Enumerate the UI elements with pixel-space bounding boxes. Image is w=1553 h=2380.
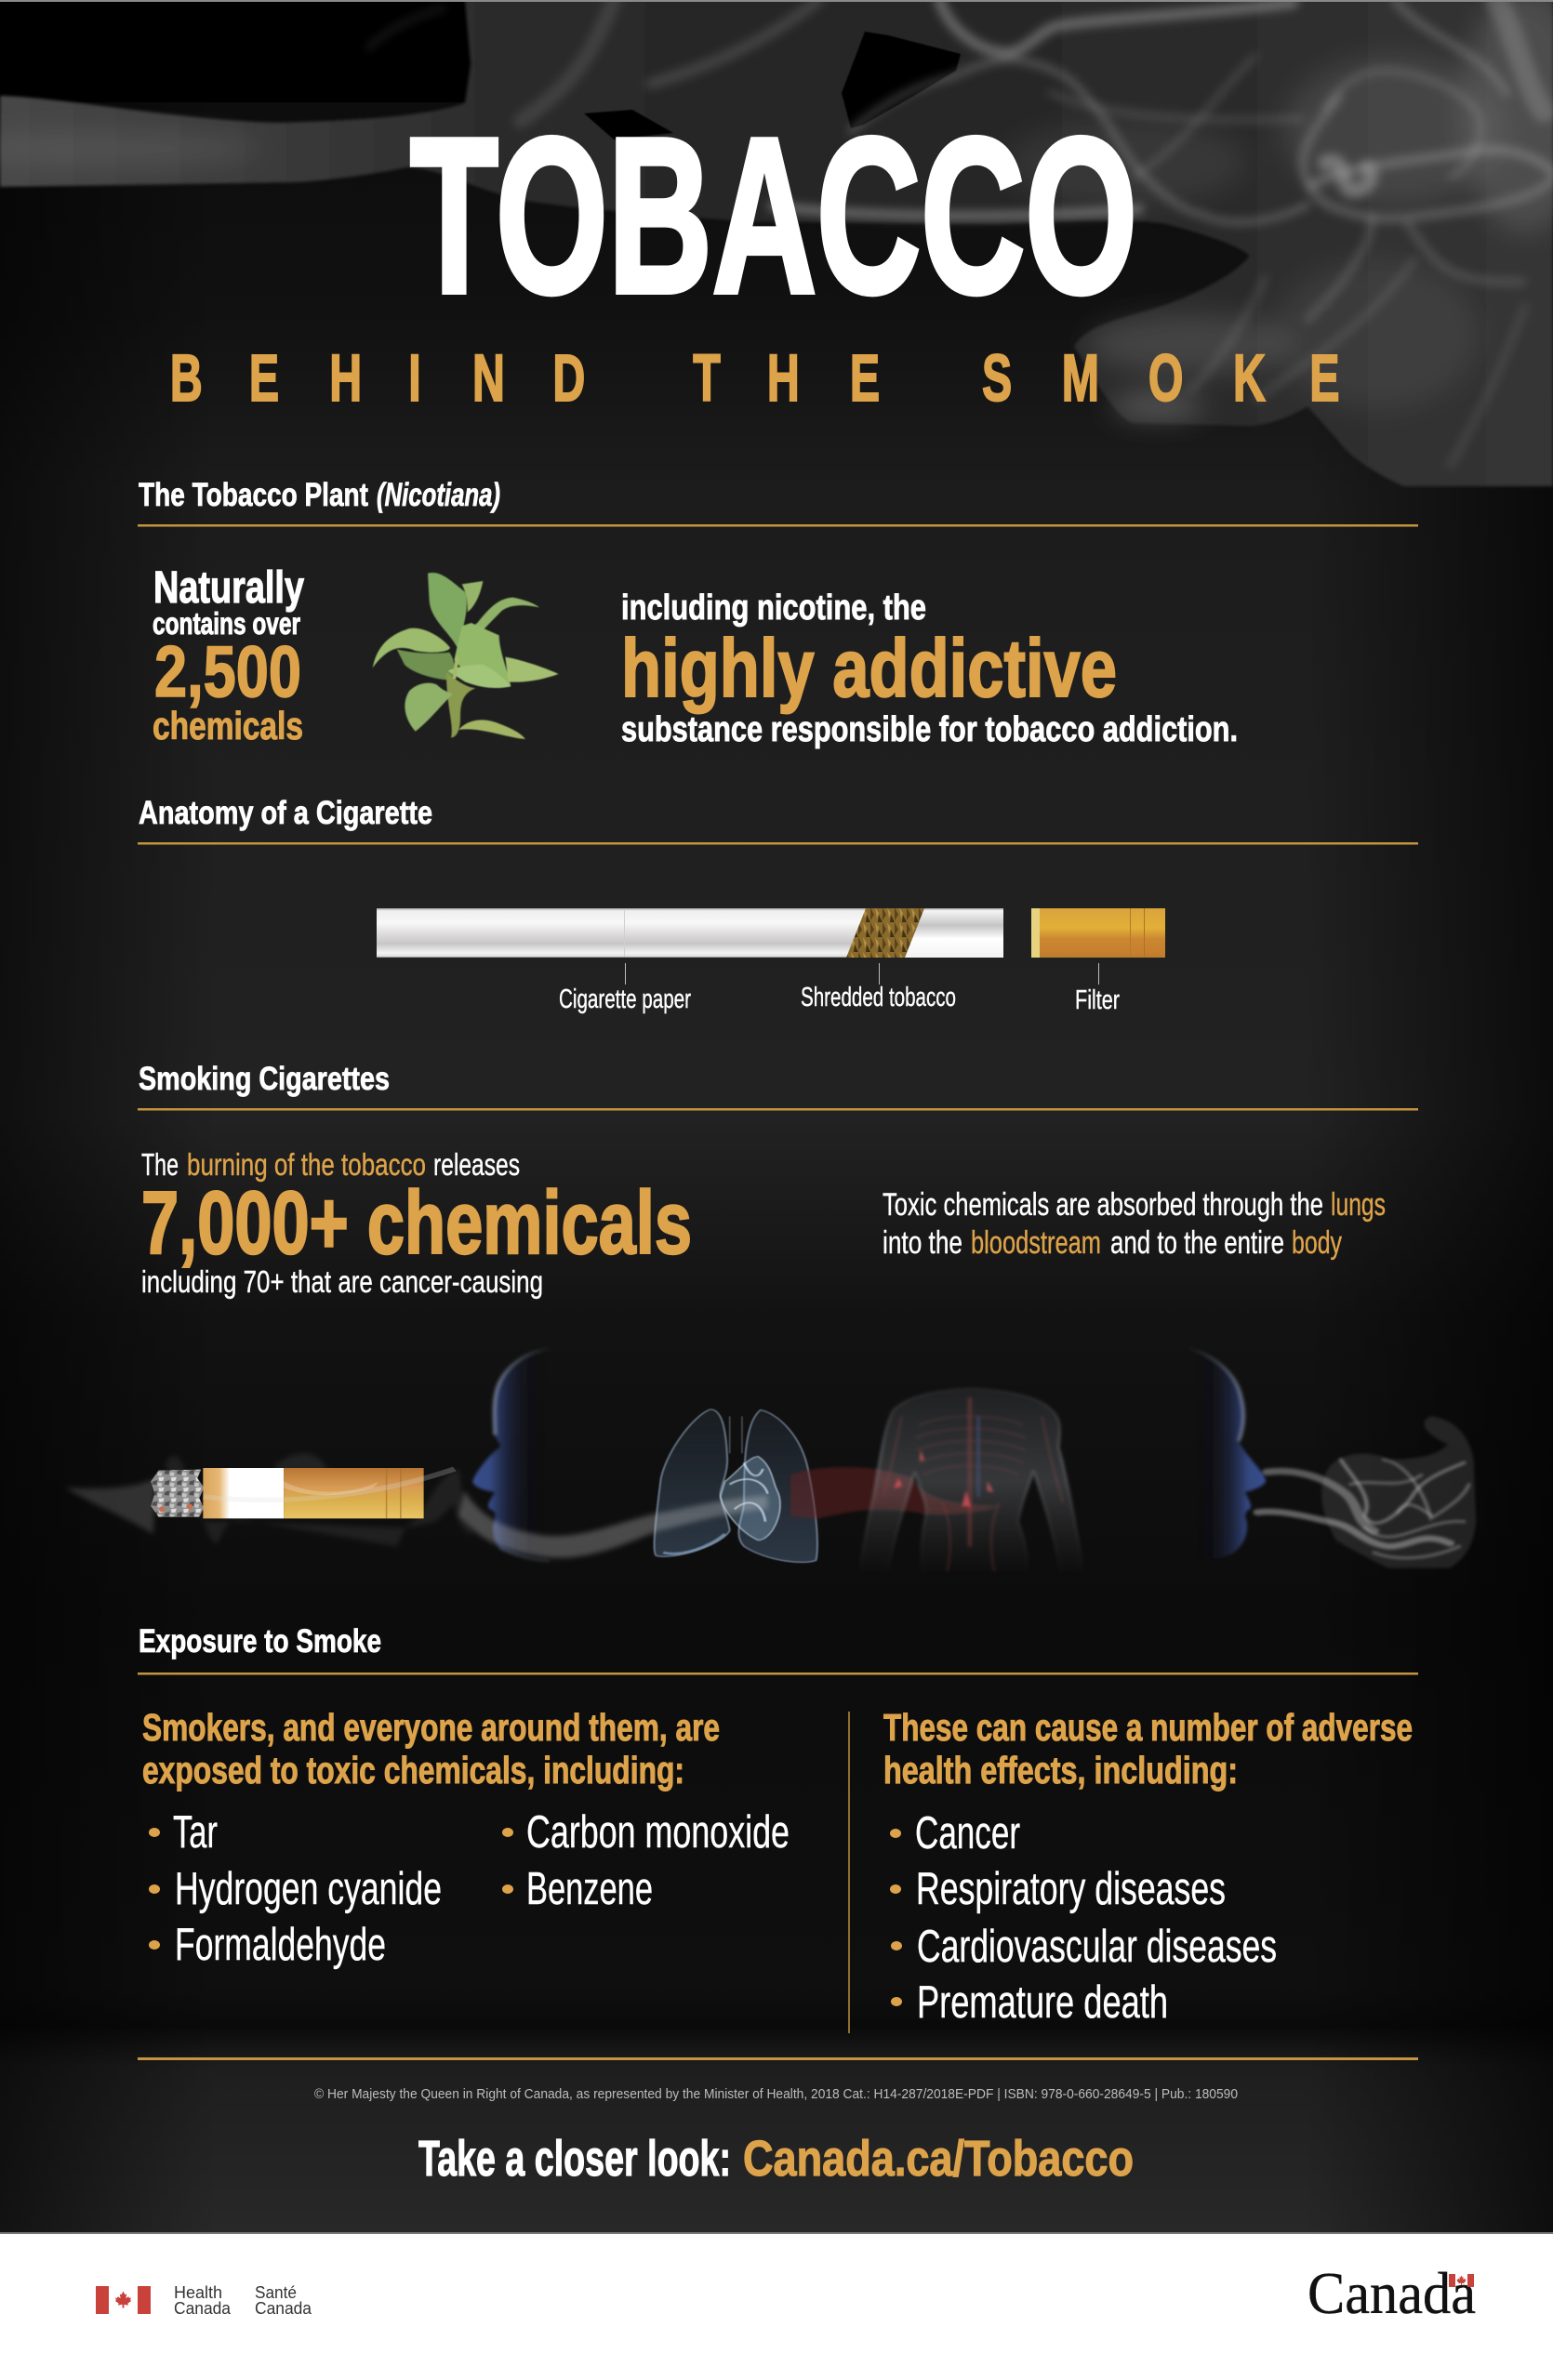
column: health effects — [883, 1706, 1413, 2028]
column: toxic chemicals: exposed to toxic chemicals, including: — [142, 1749, 684, 1792]
text: toxic chemicals absorbed — [883, 1187, 1386, 1261]
smoke wisps — [65, 1453, 473, 1546]
text: highly addictive: substance responsible for tobacco addiction. — [621, 710, 1238, 749]
text: health canada sante canada — [174, 2283, 312, 2318]
section: the tobacco plant — [138, 477, 1418, 749]
column: toxic chemicals — [142, 1706, 790, 1970]
text: 7,000+ chemicals: The — [141, 1147, 179, 1182]
list: respiratory diseases: Respiratory diseases — [916, 1864, 1226, 1914]
text: naturally contains 2,500 chemicals: chemicals — [153, 704, 303, 747]
list: tar: Tar — [173, 1807, 218, 1858]
text: toxic chemicals absorbed: lungs — [1331, 1187, 1386, 1223]
heading: smoking cigarettes: Smoking Cigarettes — [139, 1061, 390, 1097]
logo: health canada flag — [96, 2286, 151, 2314]
subtitle: BEHINDTHESMOKE — [170, 341, 1339, 415]
call to action — [418, 2131, 1134, 2187]
list: carbon monoxide: Carbon monoxide — [526, 1807, 790, 1858]
text: toxic chemicals absorbed: into the — [883, 1225, 962, 1261]
smoke band into lungs — [459, 1490, 768, 1558]
list: hydrogen cyanide: Hydrogen cyanide — [175, 1864, 442, 1914]
copyright line: © Her Majesty the Queen in Right of Canada, as represented by the Minister of Health, 2018 Cat.: H14-287/2018E-PDF | ISBN: 978-0-660-28649-5 | Pub.: 180590 — [314, 2086, 1238, 2102]
call to action: Take a closer look: — [418, 2131, 731, 2187]
text: 7,000+ chemicals: releases — [433, 1147, 520, 1182]
list: cancer: Cancer — [915, 1808, 1020, 1858]
list: formaldehyde — [149, 1920, 386, 1970]
logo: canada wordmark: Canada — [1307, 2260, 1476, 2326]
text: 7,000+ chemicals — [141, 1147, 692, 1299]
text: health canada sante canada: Canada — [255, 2299, 312, 2318]
text: toxic chemicals absorbed: bloodstream — [971, 1225, 1101, 1261]
icon: face inhaling — [472, 1347, 564, 1562]
label: shredded tobacco: Shredded tobacco — [801, 983, 956, 1012]
text: 7,000+ chemicals: burning of the tobacco — [187, 1147, 426, 1182]
column: health effects: health effects, including: — [883, 1749, 1238, 1792]
text: health canada sante canada: Santé — [255, 2283, 297, 2302]
list: cardiovascular diseases: Cardiovascular diseases — [917, 1922, 1277, 1972]
text: naturally contains 2,500 chemicals: contains over — [153, 606, 300, 641]
text: 7,000+ chemicals: 7,000+ chemicals — [141, 1173, 692, 1273]
list: carbon monoxide — [502, 1807, 790, 1858]
icon: lungs and heart — [654, 1409, 817, 1562]
list: benzene: Benzene — [526, 1864, 653, 1914]
text: toxic chemicals absorbed: and to the entire — [1110, 1225, 1284, 1261]
list: premature death: Premature death — [917, 1977, 1168, 2028]
list: formaldehyde: Formaldehyde — [175, 1920, 386, 1970]
text: toxic chemicals absorbed: Toxic chemicals are absorbed through the — [883, 1187, 1323, 1223]
title: TOBACCO — [410, 93, 1137, 339]
list: cancer — [890, 1808, 1020, 1858]
icon: face exhaling — [1184, 1346, 1266, 1564]
text: naturally contains 2,500 chemicals: Naturally — [153, 563, 304, 613]
heading: the tobacco plant: The Tobacco Plant — [139, 477, 368, 513]
column: health effects: These can cause a number of adverse — [883, 1706, 1413, 1749]
heading: anatomy of a cigarette: Anatomy of a Cigarette — [139, 795, 432, 831]
text: highly addictive: including nicotine, the — [621, 588, 926, 628]
text: health canada sante canada: Health — [174, 2283, 222, 2302]
smoke exhaled — [1258, 1416, 1476, 1568]
text: naturally contains 2,500 chemicals — [153, 563, 304, 747]
footer band — [0, 2232, 1553, 2380]
text: naturally contains 2,500 chemicals: 2,500 — [154, 630, 301, 712]
text: highly addictive — [621, 588, 1238, 749]
icon: tobacco plant — [373, 573, 559, 739]
icon: cigarette burning — [151, 1468, 455, 1518]
section: exposure to smoke — [138, 1623, 1418, 2033]
illustration: smoke path through the body — [65, 1346, 1476, 1596]
text: 7,000+ chemicals: including 70+ that are cancer-causing — [141, 1264, 543, 1299]
list: cardiovascular diseases — [891, 1922, 1277, 1972]
list: premature death — [891, 1977, 1168, 2028]
heading: exposure to smoke: Exposure to Smoke — [139, 1623, 381, 1659]
icon: body with blood vessels — [790, 1388, 1087, 1596]
call to action: Canada.ca/Tobacco — [743, 2131, 1134, 2187]
text: health canada sante canada: Canada — [174, 2299, 232, 2318]
list: hydrogen cyanide — [149, 1864, 442, 1914]
smoke: top background — [0, 0, 1553, 486]
section: smoking cigarettes — [65, 1061, 1476, 1596]
text: toxic chemicals absorbed: body — [1292, 1225, 1342, 1261]
list: tar — [149, 1807, 218, 1858]
list: respiratory diseases — [890, 1864, 1226, 1914]
label: cigarette paper: Cigarette paper — [559, 985, 691, 1014]
heading: the tobacco plant: (Nicotiana) — [377, 477, 500, 513]
section: anatomy of a cigarette — [138, 795, 1418, 1015]
column: toxic chemicals: Smokers, and everyone around them, are — [142, 1706, 720, 1749]
text: highly addictive: highly addictive — [621, 622, 1117, 714]
label: filter: Filter — [1075, 985, 1120, 1015]
label: filter — [1075, 963, 1120, 1015]
list: benzene — [502, 1864, 653, 1914]
cigarette diagram — [377, 908, 1165, 958]
